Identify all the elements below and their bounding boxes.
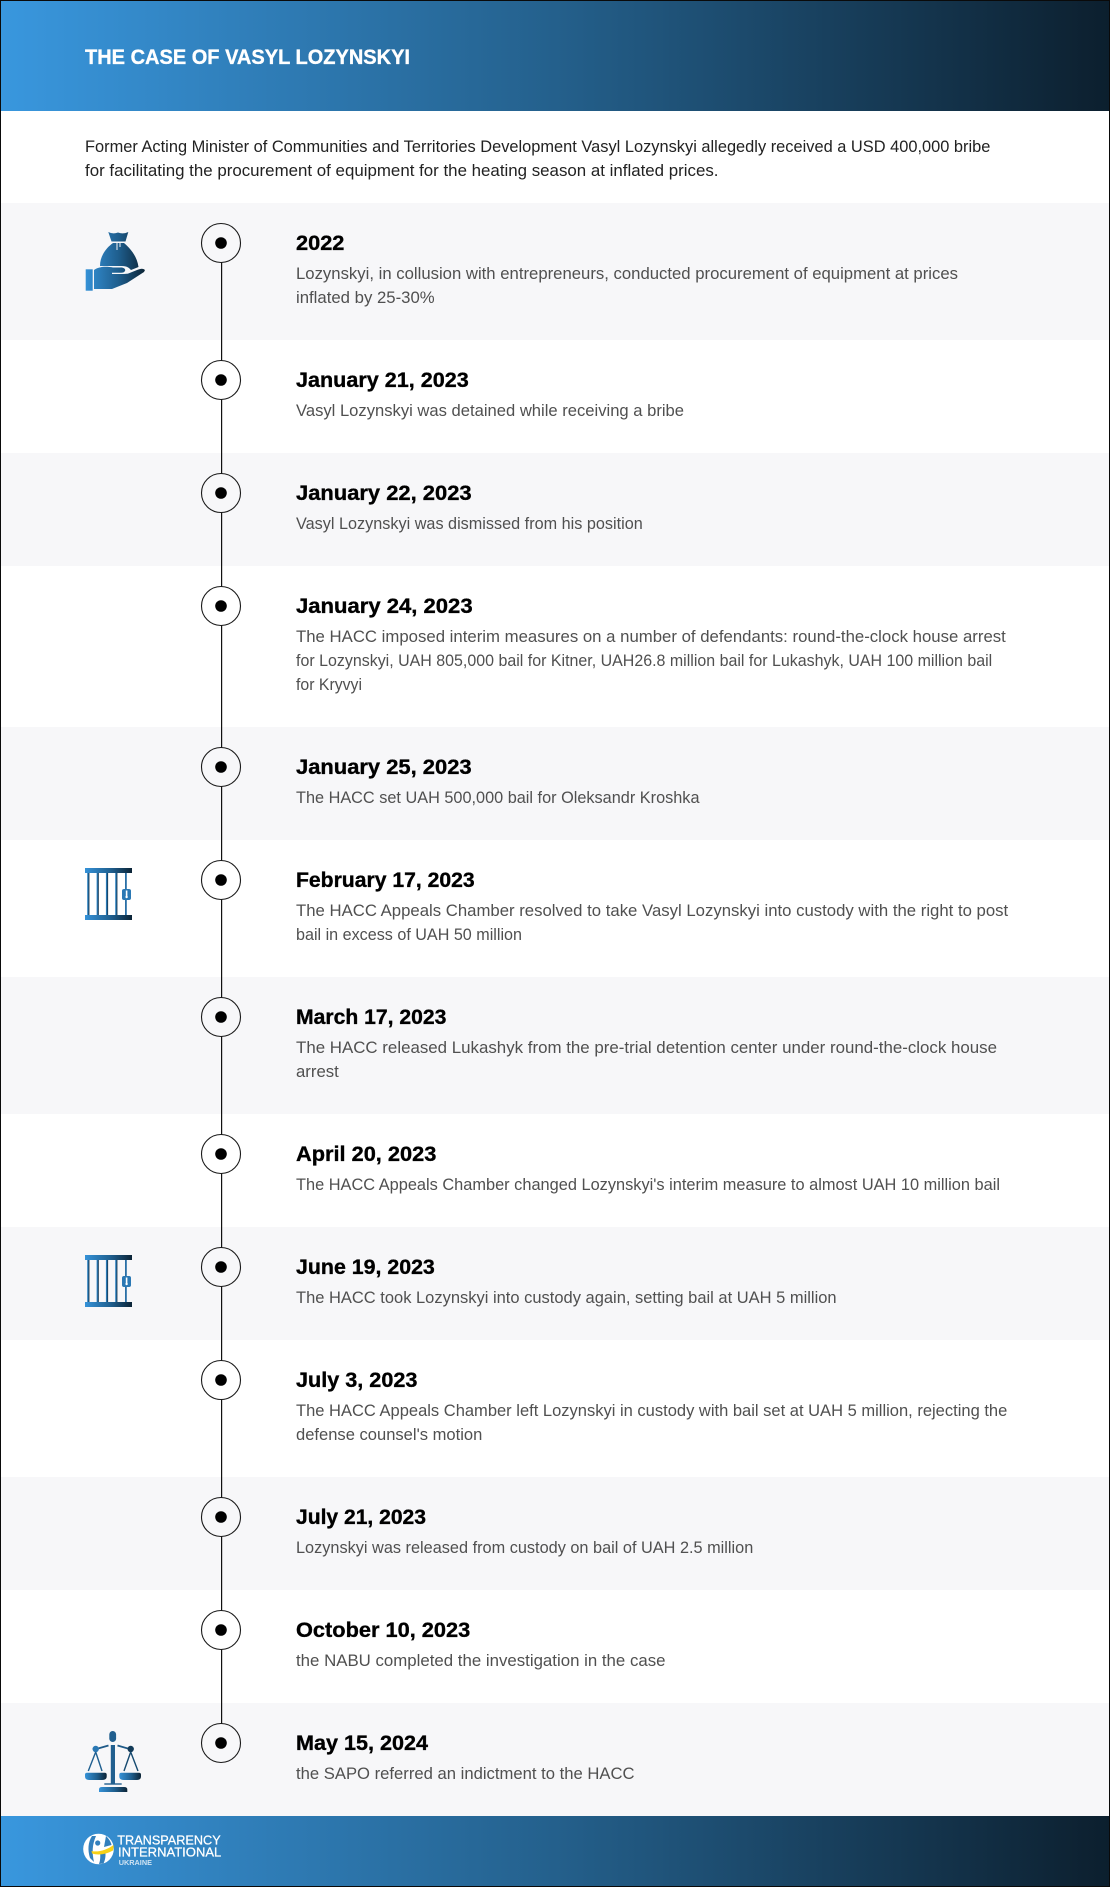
- timeline node: [202, 860, 240, 900]
- header band: [1, 1, 1109, 111]
- timeline node: [202, 1498, 240, 1536]
- description: The HACC Appeals Chamber changed Lozynskyi's interim measure to almost UAH 10 million bail: [296, 1175, 1000, 1194]
- description: for Kryvyi: [296, 675, 362, 694]
- timeline node: [202, 1724, 240, 1762]
- date: July 3, 2023: [296, 1369, 417, 1392]
- description: The HACC released Lukashyk from the pre-trial detention center under round-the-clock house: [296, 1038, 997, 1057]
- timeline node: [202, 1248, 240, 1286]
- timeline row: January 24, 2023: [202, 586, 1006, 694]
- timeline row: January 22, 2023: [1, 453, 1109, 566]
- date: May 15, 2024: [296, 1732, 428, 1755]
- timeline node: [202, 586, 240, 626]
- logo emblem: [83, 1834, 114, 1864]
- logo wordmark: INTERNATIONAL: [118, 1845, 221, 1860]
- timeline vertical line: [221, 262, 223, 1724]
- description: The HACC imposed interim measures on a number of defendants: round-the-clock house arrest: [296, 627, 1006, 646]
- logo: Transparency International Ukraine: [83, 1832, 221, 1867]
- icon: scales of justice: [85, 1731, 141, 1792]
- description: [296, 1401, 1007, 1444]
- timeline row: January 25, 2023: [1, 727, 1109, 840]
- timeline row: July 3, 2023: [202, 1360, 1007, 1444]
- timeline node: [202, 224, 240, 262]
- description: defense counsel's motion: [296, 1425, 482, 1444]
- description: Vasyl Lozynskyi was dismissed from his position: [296, 514, 643, 533]
- title: THE CASE OF VASYL LOZYNSKYI: [85, 46, 410, 69]
- description: bail in excess of UAH 50 million: [296, 925, 522, 944]
- description: Lozynskyi, in collusion with entrepreneurs, conducted procurement of equipment at prices: [296, 264, 958, 283]
- description: [296, 627, 1006, 694]
- timeline node: [202, 474, 240, 512]
- timeline node: [202, 1610, 240, 1650]
- timeline node: [202, 748, 240, 786]
- date: January 21, 2023: [296, 369, 469, 392]
- timeline row: June 19, 2023: [1, 1227, 1109, 1340]
- timeline row: 2022: [1, 203, 1109, 340]
- timeline row: July 21, 2023: [1, 1477, 1109, 1590]
- timeline row: January 21, 2023: [202, 360, 684, 420]
- intro text block: Former Acting Minister of Communities and Territories Development Vasyl Lozynskyi allegedly received a USD 400,000 bribe: [85, 137, 990, 156]
- date: June 19, 2023: [296, 1256, 435, 1279]
- date: July 21, 2023: [296, 1506, 426, 1529]
- timeline row: April 20, 2023: [202, 1134, 1000, 1194]
- date: March 17, 2023: [296, 1006, 446, 1029]
- timeline row: March 17, 2023: [1, 977, 1109, 1114]
- timeline node: [202, 1360, 240, 1400]
- date: January 22, 2023: [296, 482, 472, 505]
- footer band: [1, 1816, 1109, 1886]
- timeline node: [202, 1134, 240, 1174]
- logo wordmark: UKRAINE: [119, 1858, 152, 1867]
- icon: prison bars: [85, 868, 132, 920]
- description: The HACC took Lozynskyi into custody again, setting bail at UAH 5 million: [296, 1288, 837, 1307]
- timeline row: May 15, 2024: [1, 1703, 1109, 1816]
- timeline row: February 17, 2023: [85, 860, 1009, 944]
- description: the NABU completed the investigation in the case: [296, 1651, 666, 1670]
- date: 2022: [296, 232, 344, 255]
- description: [296, 901, 1009, 944]
- description: [296, 1038, 997, 1081]
- date: October 10, 2023: [296, 1619, 470, 1642]
- icon: prison bars: [85, 1255, 132, 1307]
- description: Lozynskyi was released from custody on bail of UAH 2.5 million: [296, 1538, 753, 1557]
- logo wordmark: TRANSPARENCY: [117, 1832, 221, 1847]
- date: February 17, 2023: [296, 869, 475, 892]
- timeline node: [202, 998, 240, 1036]
- description: The HACC Appeals Chamber resolved to take Vasyl Lozynskyi into custody with the right to post: [296, 901, 1009, 920]
- description: inflated by 25-30%: [296, 288, 435, 307]
- logo wordmark: [117, 1832, 221, 1867]
- description: [296, 264, 958, 307]
- timeline node: [202, 360, 240, 400]
- date: January 25, 2023: [296, 756, 472, 779]
- description: the SAPO referred an indictment to the HACC: [296, 1764, 635, 1783]
- description: Vasyl Lozynskyi was detained while receiving a bribe: [296, 401, 684, 420]
- intro text block: [85, 137, 990, 180]
- description: The HACC Appeals Chamber left Lozynskyi in custody with bail set at UAH 5 million, rejecting the: [296, 1401, 1007, 1420]
- description: for Lozynskyi, UAH 805,000 bail for Kitner, UAH26.8 million bail for Lukashyk, UAH 100 million bail: [296, 651, 992, 670]
- icon: money bag in hand: [86, 232, 145, 291]
- description: arrest: [296, 1062, 339, 1081]
- date: April 20, 2023: [296, 1143, 436, 1166]
- date: January 24, 2023: [296, 595, 473, 618]
- description: The HACC set UAH 500,000 bail for Oleksandr Kroshka: [296, 788, 700, 807]
- timeline row: October 10, 2023: [202, 1610, 666, 1670]
- intro text block: for facilitating the procurement of equipment for the heating season at inflated prices.: [85, 161, 718, 180]
